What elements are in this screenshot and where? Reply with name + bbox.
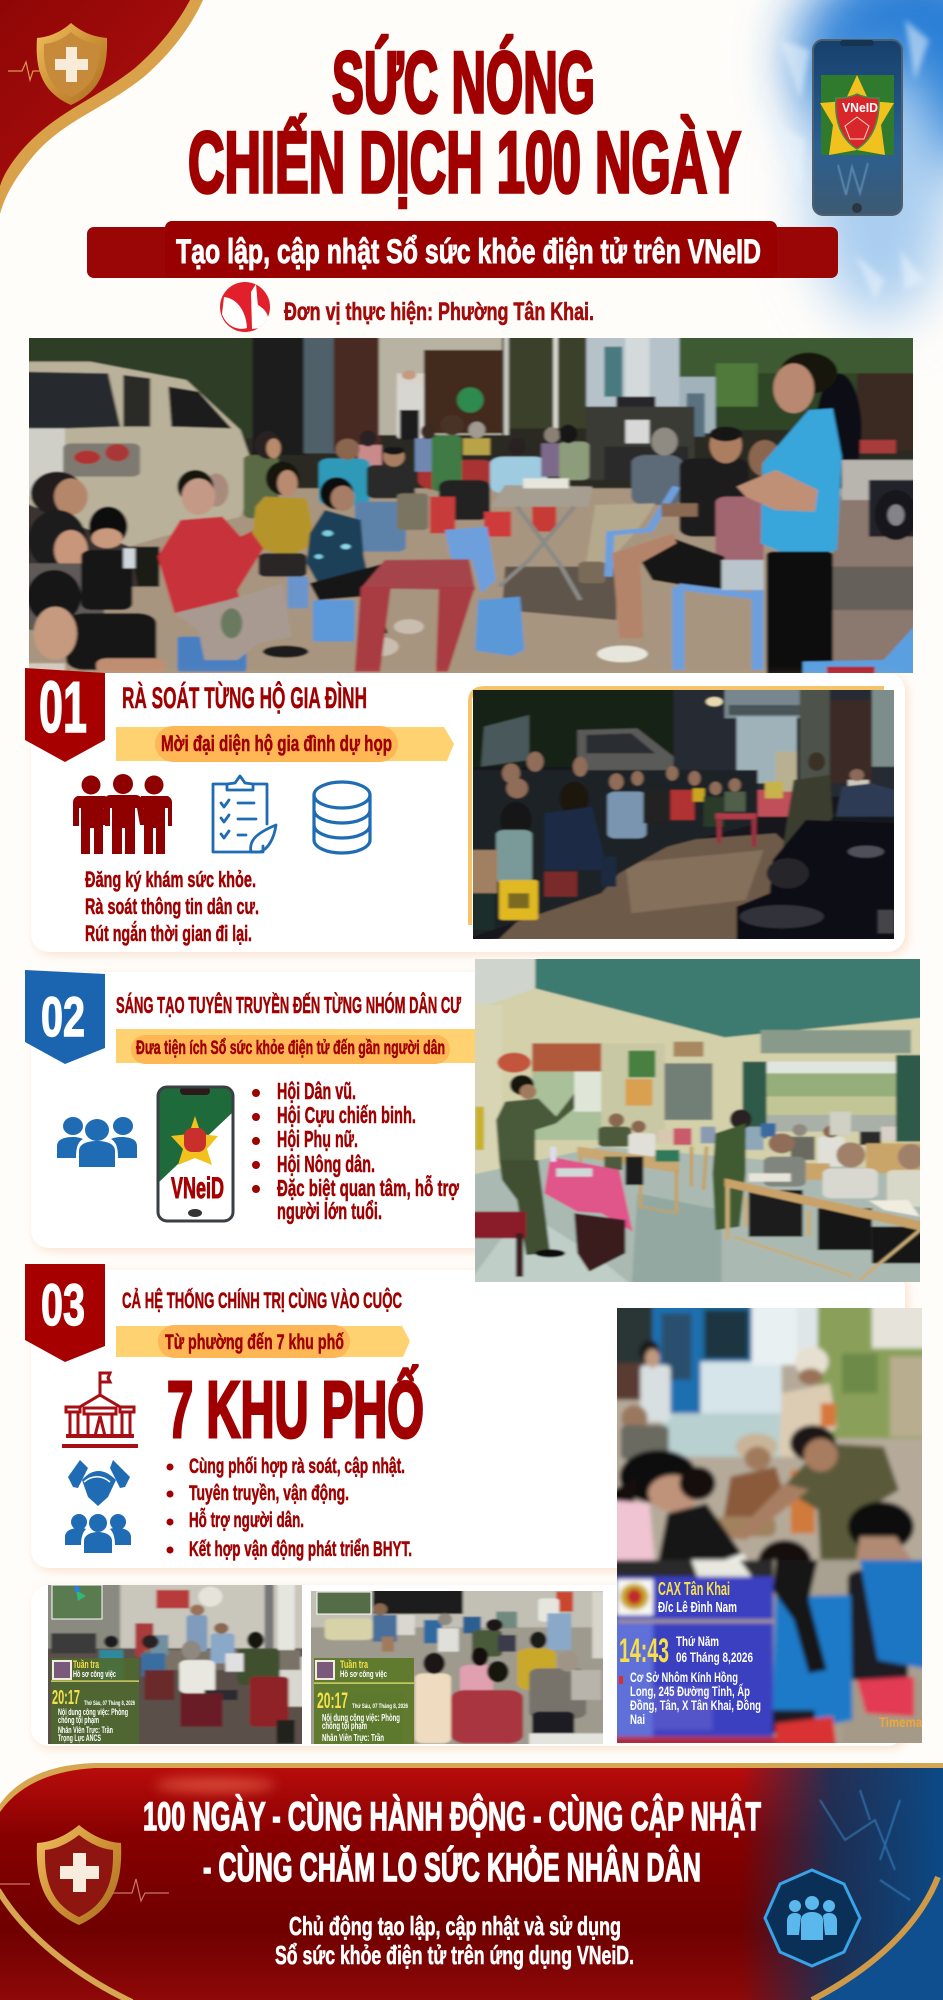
timemark overlay text: Timemark <box>879 1714 933 1730</box>
list: actions: Kết hợp vận động phát triển BHYT. <box>189 1538 412 1561</box>
overlay card: patrol A: Trọng Lực ANCS <box>58 1733 101 1743</box>
icon: people group <box>57 1117 137 1167</box>
section 01 text block: Rà soát thông tin dân cư. <box>85 894 259 919</box>
icon: three people <box>73 774 172 854</box>
list: actions: Tuyên truyền, vận động. <box>189 1482 349 1505</box>
badge 01: 01 <box>39 668 87 748</box>
icon: footer shield <box>0 1825 169 1925</box>
panel: section 01 <box>25 668 905 952</box>
main photo: community meeting <box>18 332 926 680</box>
overlay card: patrol B: Tuần tra <box>340 1659 369 1671</box>
footer banner <box>0 1763 943 2000</box>
overlay card: patrol B: Thứ Sáu, 07 Tháng 8, 2026 <box>352 1704 408 1710</box>
list: target groups: Đặc biệt quan tâm, hỗ trợ <box>277 1174 459 1201</box>
icon: phone with VNeID logo <box>813 40 902 215</box>
overlay card: patrol A: Thứ Sáu, 07 Tháng 8, 2026 <box>84 1701 135 1707</box>
footer slogan <box>143 1793 761 1890</box>
subtitle banner <box>87 221 838 278</box>
standing woman <box>817 373 862 460</box>
timemark overlay text: 14:43 <box>619 1632 669 1670</box>
overlay card: patrol A: Nhân Viên Trực: Trần <box>58 1725 113 1735</box>
banner: bring benefits: Đưa tiện ích Sổ sức khỏe điện tử đến gần người dân <box>136 1038 445 1059</box>
red jacket woman <box>177 637 247 672</box>
list: target groups: Hội Phụ nữ. <box>277 1126 358 1152</box>
overlay card: patrol B: Nội dung công việc: Phòng <box>322 1713 400 1724</box>
icon: gold shield with cross <box>8 23 107 105</box>
section 02 heading: SÁNG TẠO TUYÊN TRUYỀN ĐẾN TỪNG NHÓM DÂN CƯ <box>116 991 462 1018</box>
badge 03 <box>25 1264 105 1362</box>
badge 02: 02 <box>41 985 85 1048</box>
badge 02 <box>25 970 105 1064</box>
list: target groups: người lớn tuổi. <box>277 1198 382 1224</box>
timemark overlay text: Thứ Năm <box>676 1633 719 1649</box>
footer call to action: Sổ sức khỏe điện tử trên ứng dụng VNeiD. <box>275 1940 634 1970</box>
banner: ward to 7 quarters: Từ phường đến 7 khu phố <box>165 1331 344 1354</box>
section 01 heading: RÀ SOÁT TỪNG HỘ GIA ĐÌNH <box>122 681 367 715</box>
list: actions <box>166 1455 412 1561</box>
overlay card: patrol A <box>51 1585 139 1744</box>
overlay card: patrol B: 20:17 <box>317 1688 348 1713</box>
list: actions: Hỗ trợ người dân. <box>189 1508 304 1532</box>
banner: ward to 7 quarters <box>116 1325 410 1358</box>
list: target groups <box>252 1078 459 1224</box>
section 01 text block: Rút ngắn thời gian đi lại. <box>85 921 252 946</box>
timemark overlay text: Long, 245 Đường Tỉnh, Ấp <box>630 1683 750 1699</box>
top-right blue glow decoration <box>770 0 943 320</box>
photo: patrol group B <box>311 1591 603 1744</box>
section 03 heading: CẢ HỆ THỐNG CHÍNH TRỊ CÙNG VÀO CUỘC <box>122 1287 402 1313</box>
implementing unit text: Đơn vị thực hiện: Phường Tân Khai. <box>284 298 594 326</box>
photo: night meeting <box>463 683 905 947</box>
timemark overlay text <box>619 1579 933 1730</box>
list: target groups: Hội Nông dân. <box>277 1151 375 1177</box>
timemark overlay text: Đồng, Tân, X Tân Khai, Đồng <box>630 1697 761 1713</box>
overlay card: patrol B <box>314 1592 414 1744</box>
gold glow behind photo 01 <box>470 688 884 925</box>
icon: phone with VNeID: VNeiD <box>171 1172 224 1205</box>
badge 01 <box>25 668 105 762</box>
officer left <box>510 1075 534 1095</box>
panel: section 02 <box>25 970 475 1256</box>
floral woman <box>313 600 355 642</box>
badge 03: 03 <box>41 1273 85 1338</box>
banner: invite households: Mời đại diện hộ gia đình dự họp <box>161 731 392 756</box>
title <box>188 35 741 211</box>
list: target groups: Hội Dân vũ. <box>277 1078 356 1104</box>
timemark overlay text: Đ/c Lê Đình Nam <box>658 1599 737 1616</box>
icon: clipboard checklist <box>213 776 276 852</box>
overlay card: patrol A: Hồ sơ công việc <box>73 1669 116 1679</box>
icon: government building <box>62 1373 138 1446</box>
overlay card: patrol B: Hồ sơ công việc <box>340 1669 387 1679</box>
footer call to action <box>275 1911 634 1970</box>
panel: bottom photos card <box>31 1585 905 1746</box>
big figure: 7 khu pho: 7 KHU PHỐ <box>167 1365 424 1454</box>
banner: bring benefits <box>116 1029 476 1064</box>
icon: ward logo <box>220 282 270 332</box>
photo: officers with residents (timemark) <box>607 1303 933 1750</box>
section 01 text block <box>85 867 259 946</box>
overlay card: patrol A: 20:17 <box>52 1687 80 1709</box>
left people <box>31 472 84 515</box>
front table and people <box>768 1133 795 1153</box>
footer call to action: Chủ động tạo lập, cập nhật và sử dụng <box>289 1911 621 1941</box>
far people <box>395 436 426 440</box>
icon: database <box>314 782 370 853</box>
overlay card: patrol A: chống tội phạm <box>58 1715 99 1725</box>
list: target groups: Hội Cựu chiến binh. <box>277 1102 416 1128</box>
icon: phone with VNeID logo: VNeID <box>842 100 878 115</box>
timemark overlay text: Nai <box>630 1711 645 1727</box>
title: SỨC NÓNG <box>332 35 595 131</box>
photo: patrol group A <box>48 1585 302 1744</box>
section 01 text block: Đăng ký khám sức khỏe. <box>85 867 256 892</box>
timemark overlay text: Cơ Sở Nhôm Kính Hồng <box>630 1669 738 1685</box>
timemark overlay text: CAX Tân Khai <box>658 1579 730 1599</box>
yellow top woman <box>266 462 299 495</box>
list: actions: Cùng phối hợp rà soát, cập nhật. <box>189 1455 405 1478</box>
panel: section 03 <box>25 1264 905 1568</box>
officer centre <box>730 1109 752 1129</box>
icon: handshake <box>68 1460 130 1506</box>
overlay card: patrol A: Tuần tra <box>73 1659 100 1671</box>
stools and table <box>445 527 496 593</box>
right people <box>604 447 688 480</box>
overlay card: patrol A: Nội dung công việc: Phòng <box>58 1707 128 1717</box>
overlay card: patrol B: Nhân Viên Trực: Trần <box>322 1732 384 1744</box>
icon: phone with VNeID <box>158 1087 233 1221</box>
icon: people blue <box>65 1514 131 1553</box>
top-left red corner with gold ribbon <box>0 0 203 214</box>
timemark overlay text: 06 Tháng 8,2026 <box>676 1649 753 1665</box>
right motorbike <box>842 460 926 500</box>
icon: octagon people <box>765 1870 860 1966</box>
photo: indoor meeting <box>463 952 932 1290</box>
overlay card: patrol B: chống tội phạm <box>322 1720 367 1732</box>
crowd <box>598 1112 932 1180</box>
banner: invite households <box>116 726 454 762</box>
